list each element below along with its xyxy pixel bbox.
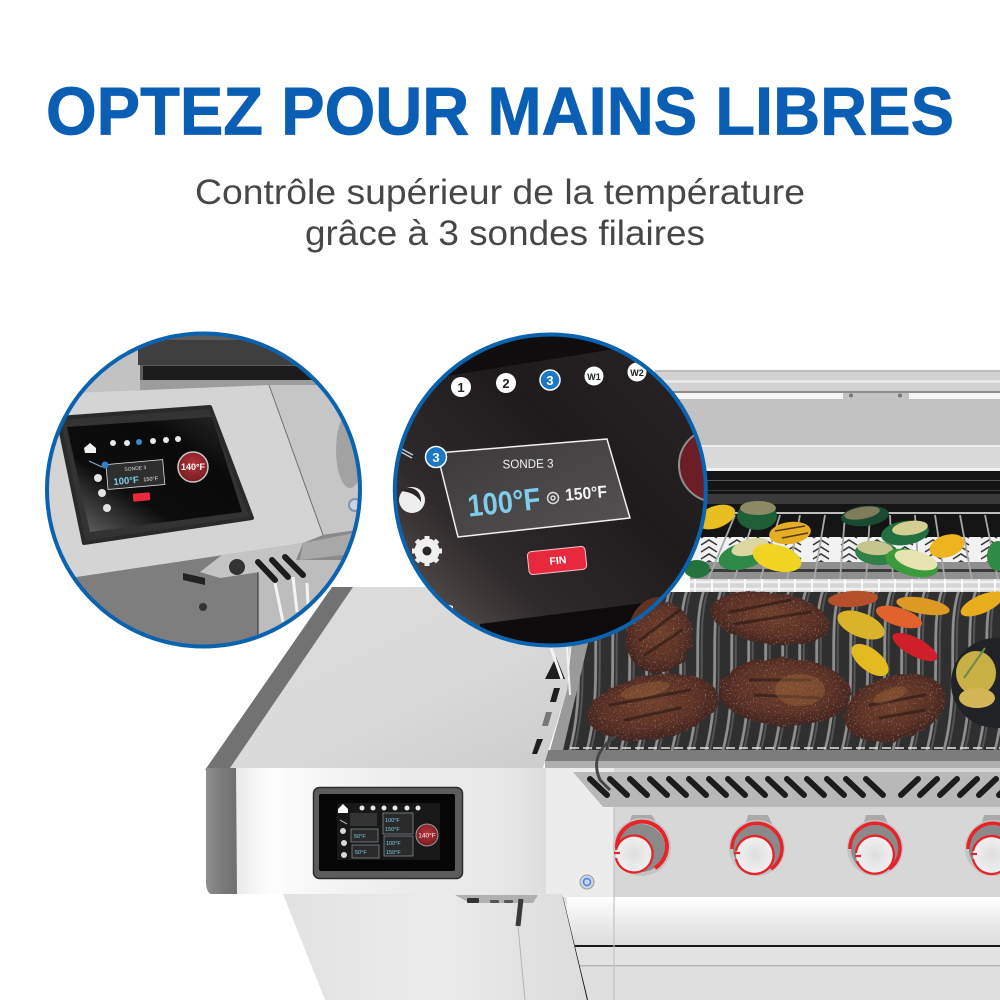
rack corner bbox=[676, 585, 711, 597]
wireless 1 button bbox=[584, 366, 604, 386]
grilled vegetables on rack bbox=[684, 500, 1000, 583]
small screen probe panels: 150°F bbox=[385, 827, 400, 833]
warming rack bbox=[690, 513, 1000, 593]
knob 3 bbox=[847, 815, 903, 876]
panel screen thermometer dial: 140°F bbox=[181, 462, 206, 472]
probe 1 button: 1 bbox=[457, 380, 465, 395]
vent strip bbox=[573, 772, 1000, 807]
blue side button bbox=[349, 499, 361, 511]
grill illustration bbox=[205, 370, 1000, 1000]
grill lid bbox=[655, 370, 1000, 475]
probe 1 button bbox=[451, 377, 471, 397]
subtitle bbox=[195, 173, 805, 253]
small screen home icon bbox=[338, 804, 348, 813]
lower grill door bbox=[562, 805, 1000, 1000]
menu icon: gear bbox=[412, 536, 442, 566]
panel screen home icon bbox=[84, 443, 96, 453]
probe ports under shelf bbox=[455, 895, 538, 1000]
panel screen probe badge bbox=[102, 462, 108, 468]
small screen probe panels: 50°F bbox=[355, 850, 367, 856]
cooking grate bbox=[563, 592, 1000, 750]
pan with potatoes bbox=[951, 638, 1000, 728]
power button bbox=[580, 875, 594, 889]
grill control body bbox=[545, 768, 1000, 897]
wireless 2 button: W2 bbox=[630, 368, 644, 378]
control knobs bbox=[613, 815, 1000, 876]
thermometer probe in steak bbox=[597, 736, 616, 790]
panel seam bbox=[269, 385, 323, 535]
firebox side wall bbox=[545, 592, 600, 768]
main steel panel bbox=[40, 385, 323, 590]
white probe cables bbox=[258, 560, 341, 635]
cabinet below side shelf bbox=[283, 894, 587, 1000]
panel screen probe dots bbox=[110, 436, 181, 446]
slot and screw under panel bbox=[183, 573, 207, 611]
knob shadow on right panel bbox=[336, 420, 358, 488]
grill marks on steaks bbox=[610, 600, 925, 720]
target icon bbox=[548, 492, 558, 504]
panel screen probe box: SONDE 3 bbox=[124, 465, 147, 473]
probe 3 button active bbox=[540, 370, 560, 390]
shelf front face bbox=[232, 768, 546, 894]
wireless 1 button: W1 bbox=[587, 372, 601, 382]
knob 4 bbox=[965, 815, 1000, 876]
grill back interior bbox=[690, 471, 1000, 591]
steaks bbox=[582, 584, 954, 755]
shelf edge slots bbox=[532, 647, 570, 754]
panel screen probe box: 150°F bbox=[143, 476, 159, 483]
zoom circle: probe 3 readout bbox=[392, 332, 708, 648]
small screen thermometer dial bbox=[416, 824, 438, 846]
right steel panel bbox=[270, 385, 358, 535]
small screen probe panels: 100°F bbox=[386, 841, 401, 847]
seared highlights on steaks bbox=[619, 674, 909, 707]
small screen menu icons bbox=[340, 820, 347, 858]
probe 2 button bbox=[496, 373, 516, 393]
current temperature: 100°F bbox=[466, 481, 542, 524]
shelf grey trim bbox=[205, 587, 353, 770]
small screen probe panels: 150°F bbox=[386, 850, 401, 856]
small screen probe dots bbox=[360, 806, 420, 810]
lower cabinet bbox=[77, 556, 258, 644]
lower steel ledge bbox=[300, 534, 352, 560]
knob 2 bbox=[729, 815, 785, 876]
probe selector buttons bbox=[451, 362, 646, 397]
side shelf top bbox=[230, 587, 600, 768]
title: OPTEZ POUR MAINS LIBRES bbox=[46, 74, 954, 150]
menu icon: probe bbox=[401, 449, 413, 458]
probe 3 button active: 3 bbox=[546, 373, 554, 388]
panel screen probe box bbox=[106, 460, 165, 489]
probe 2 button: 2 bbox=[502, 376, 510, 391]
panel screen probe box: 100°F bbox=[113, 475, 140, 488]
panel screen stop button bbox=[133, 492, 150, 502]
wireless 2 button bbox=[628, 362, 646, 382]
probe 3 badge: 3 bbox=[432, 450, 440, 465]
panel touchscreen bbox=[58, 407, 252, 543]
front rail bbox=[545, 750, 1000, 770]
target temperature: 150°F bbox=[564, 482, 608, 505]
knob 1 bbox=[613, 815, 671, 876]
menu icon: moon fragment bbox=[446, 604, 453, 611]
end button bbox=[527, 546, 587, 575]
small screen probe panels: 100°F bbox=[385, 818, 400, 824]
end button: FIN bbox=[549, 554, 567, 568]
shelf end cap bbox=[206, 768, 237, 894]
food corner bbox=[630, 597, 660, 621]
small screen thermometer dial: 140°F bbox=[418, 832, 436, 840]
small screen probe panels bbox=[350, 813, 413, 858]
menu icon: ball bbox=[399, 487, 425, 513]
subtitle: Contrôle supérieur de la température bbox=[195, 173, 805, 212]
shelf touchscreen bbox=[314, 788, 462, 878]
panel screen menu icons bbox=[89, 461, 111, 512]
probe 3 badge bbox=[426, 446, 446, 468]
probe port bracket bbox=[200, 543, 303, 580]
grilled peppers bbox=[828, 586, 1000, 682]
zoom circle: control panel with probe ports bbox=[40, 330, 370, 660]
probe readout box bbox=[437, 439, 630, 537]
thermometer dial edge bbox=[679, 428, 753, 502]
screen bottom and top shading bbox=[480, 603, 642, 644]
top appliance area bbox=[84, 336, 316, 392]
readout label: SONDE 3 bbox=[502, 457, 554, 471]
subtitle: grâce à 3 sondes filaires bbox=[305, 214, 705, 253]
panel screen thermometer dial bbox=[178, 452, 208, 482]
small screen probe panels: 50°F bbox=[354, 834, 366, 840]
